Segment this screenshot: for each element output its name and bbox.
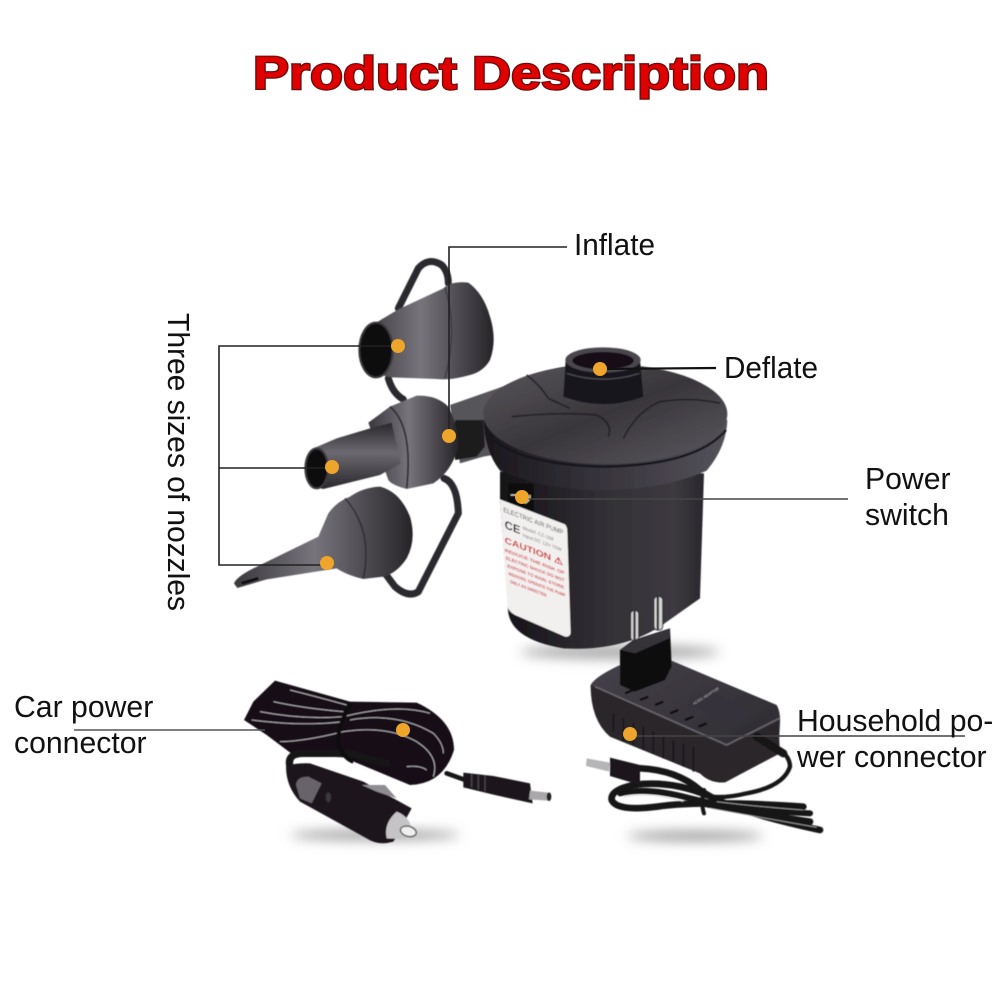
nozzle: medium: [305, 396, 458, 489]
dc barrel plug: [463, 773, 551, 803]
pump label sticker: CE: [505, 519, 521, 537]
nozzles and pump arm: [234, 262, 600, 594]
callout: nozzle bracket: [219, 346, 398, 565]
pump label sticker: Input:DC 12V 75W: [523, 533, 562, 553]
deflate port: [563, 360, 643, 404]
pump arm: [450, 362, 600, 463]
label: power switch: switch: [865, 499, 949, 532]
power switch: [508, 483, 534, 512]
pump label sticker: ONLY AS DIRECTED: [510, 579, 547, 598]
rating plate: [687, 686, 750, 725]
title: Product Description: [253, 47, 769, 99]
shadow: pump: [520, 645, 720, 659]
pump label sticker: REDUCE THE RISK OF: [505, 548, 565, 576]
callout: deflate leader: [600, 368, 716, 369]
pump lid top: [483, 364, 727, 464]
pump label sticker: CAUTION ⚠: [505, 535, 563, 567]
pump label sticker: ELECTRIC SHOCK DO NOT: [506, 555, 565, 583]
callout: inflate leader: [449, 247, 567, 436]
pump label sticker: INDOORS. OPERATE THE PUMP: [509, 571, 565, 598]
nozzle handle wires: [385, 262, 458, 594]
adapter face: [591, 685, 780, 782]
callout: household leader: [630, 735, 965, 737]
callout: power switch leader: [522, 498, 848, 500]
plug block: [620, 628, 672, 692]
label: household power connector: Household po-: [797, 705, 993, 738]
household power adapter: [586, 597, 820, 830]
label: car power connector: connector: [14, 727, 147, 760]
pump: [483, 347, 727, 649]
marker dots: [320, 339, 637, 741]
label: household power connector: wer connector: [796, 741, 987, 774]
pump body: [500, 472, 704, 649]
coil base: [244, 681, 454, 785]
nozzle: small pointed: [234, 487, 413, 588]
label: power switch: Power: [865, 463, 951, 496]
label: deflate: Deflate: [724, 352, 818, 385]
vent lines: [613, 713, 693, 772]
adapter cable: [612, 737, 820, 830]
adapter cable highlights: [623, 795, 817, 827]
lid edge line: [485, 430, 726, 467]
label: inflate: Inflate: [574, 229, 655, 262]
pump label sticker: EXPOSE TO RAIN. STORE: [507, 563, 564, 590]
shadow: car connector: [290, 830, 460, 840]
callout: car leader: [74, 729, 265, 731]
lid seams: [512, 375, 720, 438]
plug pins: [631, 597, 663, 641]
pump label sticker: [500, 499, 571, 637]
pump label sticker: ELECTRIC AIR PUMP: [503, 507, 564, 537]
car power connector: [244, 681, 551, 843]
adapter body: [591, 660, 780, 782]
cigarette lighter plug: [286, 763, 417, 843]
dc barrel plug: [586, 758, 640, 785]
rating plate: AC/DC ADAPTOR: [692, 686, 720, 706]
label: three sizes of nozzles: Three sizes of nozzles: [161, 313, 194, 611]
shadow: household connector: [627, 831, 763, 841]
cable coil: [289, 753, 470, 782]
label: car power connector: Car power: [14, 691, 153, 724]
pump label sticker: Model: CZ-168: [523, 525, 554, 543]
nozzle: large: [359, 282, 494, 379]
cable tie: [338, 703, 353, 762]
cable highlights: [252, 690, 443, 777]
pump lid skirt: [483, 420, 727, 490]
